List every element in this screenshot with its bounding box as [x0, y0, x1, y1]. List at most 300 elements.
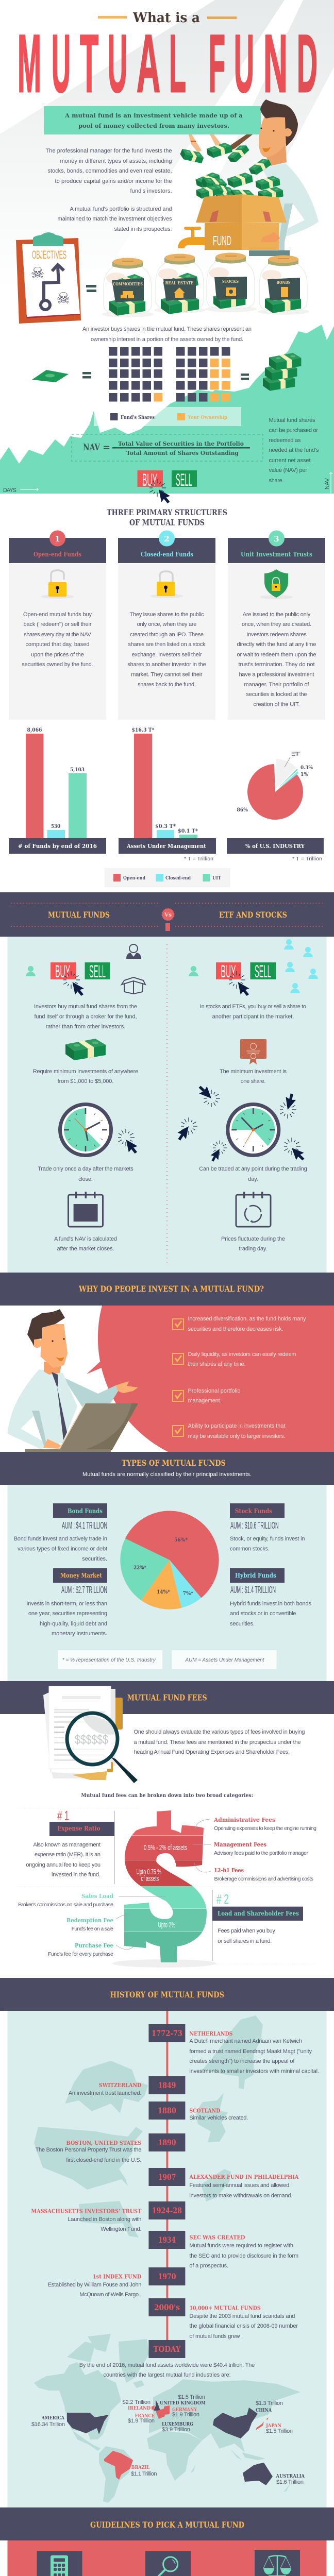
chart legend	[104, 868, 230, 887]
fee: redemption: Redemption Fee	[66, 1917, 113, 1924]
buy sell buttons	[51, 962, 110, 997]
fees intro text: One should always evaluate the various types of fees involved in buying	[134, 1729, 305, 1735]
text: trade timing	[38, 1166, 133, 1182]
buy sell buttons: BUY	[142, 470, 157, 490]
dollar sign labels	[136, 1843, 187, 1929]
load fees text: or sell shares in a fund.	[218, 1938, 272, 1944]
timeline: 1849	[69, 2076, 185, 2096]
timeline: 1907: ALEXANDER FUND IN PHILADELPHIA	[189, 2173, 299, 2180]
text: prices: trading day.	[239, 1246, 267, 1252]
pie chart: percent of US industry: 1%	[300, 771, 308, 777]
load fees text: Fees paid when you buy	[218, 1928, 275, 1934]
versus badge	[162, 909, 174, 931]
timeline: 1890	[36, 2133, 185, 2163]
fund type: stock funds: AUM : $10.6 TRILLION	[230, 1520, 278, 1531]
guideline: portfolio managers	[135, 2551, 201, 2576]
countries highlighted: dark	[67, 2400, 273, 2485]
fee: administrative: Operating expenses to keep the engine running	[214, 1825, 316, 1832]
timeline: 2000s: 10,000+ MUTUAL FUNDS	[189, 2304, 261, 2311]
icon: clock	[226, 1103, 280, 1157]
fund type: hybrid funds: Hybrid funds invest in both bonds	[230, 1601, 311, 1607]
icon: other participants	[284, 939, 318, 993]
dollar fees diagram	[17, 1808, 316, 1968]
fund type: money market: one year, securities representing	[28, 1611, 107, 1617]
bar chart: assets under management: $0.1 T*	[178, 828, 198, 834]
label: Australia: AUSTRALIA	[276, 2474, 305, 2479]
fee: 12-b1: Brokerage commissions and advertising costs	[214, 1876, 313, 1882]
fee: administrative: Administrative Fees	[213, 1816, 275, 1823]
NAV formula: Total Amount of Shares Outstanding	[126, 449, 239, 456]
footnote: * T = Trillion	[292, 856, 322, 862]
icon: calendar with clock	[236, 1192, 271, 1227]
right column: etf and stocks flow	[175, 939, 318, 1252]
fund type: money market	[26, 1568, 107, 1637]
reason 4	[173, 1423, 286, 1439]
title word: MUTUAL FUND	[18, 18, 318, 109]
dollar sign labels: Upto 2%	[158, 1921, 175, 1929]
reason 1: securities and therefore decreases risk.	[188, 1326, 283, 1332]
text: trade timing: Can be traded at any point during the trading	[199, 1166, 307, 1172]
expense ratio text: expense ratio (MER). It is an	[35, 1852, 101, 1858]
chart caption	[119, 838, 216, 854]
money pile	[195, 157, 283, 205]
timeline: 1907	[148, 2168, 299, 2199]
NAV explanation text	[269, 417, 319, 484]
title word: MUTUAL FUND: L	[169, 18, 186, 109]
dollar sign labels: of assets	[141, 1874, 159, 1883]
icon: investor	[189, 966, 198, 976]
equals right	[241, 374, 249, 380]
icon: calculator	[51, 2555, 68, 2576]
timeline: 1934: 1934	[158, 2235, 176, 2245]
card text: shares back to the fund.	[138, 682, 196, 688]
card text: Are issued to the public only	[243, 612, 311, 618]
NAV formula: Total Value of Securities in the Portfolio	[118, 440, 244, 447]
category: expense ratio: Expense Ratio	[58, 1824, 100, 1832]
expense ratio text: invested in the fund.	[52, 1872, 101, 1878]
card text: created through an IPO. These	[130, 632, 204, 638]
expense ratio text	[26, 1842, 101, 1878]
band heading: mutual fund fees	[0, 1681, 334, 1714]
label: Ireland: $2.2 Trillion	[123, 2399, 151, 2405]
label: Luxemburg: LUXEMBURG	[162, 2422, 193, 2427]
card text: creation of the UIT.	[254, 702, 300, 708]
bar chart: assets under management: $16.3 T*	[132, 727, 155, 733]
fee: redemption: Fund's fee on a sale	[72, 1926, 113, 1932]
magnifier: $$$$$$	[75, 1733, 108, 1747]
left column: mutual funds flow	[26, 944, 145, 1252]
timeline: 1970: 1970	[158, 2272, 176, 2281]
text: where shares come from: fund itself or through a broker for the fund,	[34, 1014, 137, 1020]
text: minimum investment: The minimum investment is	[220, 1069, 287, 1075]
fund type: money market: Money Market	[60, 1571, 102, 1579]
card text: securities is locked at the	[246, 691, 307, 698]
timeline: 1772-73	[148, 2024, 319, 2074]
reason 3: Professional portfolio	[188, 1388, 240, 1394]
fund type: hybrid funds: Hybrid Funds	[235, 1571, 276, 1579]
band heading: history	[0, 1978, 334, 2011]
text: nav timing	[54, 1236, 117, 1252]
timeline: 1924-28: MASSACHUSETTS INVESTORS' TRUST	[31, 2207, 142, 2214]
NAV formula: NAV	[83, 442, 101, 453]
bar chart: assets under management	[119, 727, 216, 862]
timeline: 2000s: 2000's	[154, 2302, 180, 2312]
timeline: today: countries with the largest mutual fund industries are:	[103, 2372, 231, 2378]
card: closed-end funds	[118, 531, 215, 720]
label: Australia	[276, 2474, 305, 2485]
timeline: 2000s	[148, 2298, 298, 2340]
reason 4: Ability to participate in investments that	[188, 1423, 286, 1429]
mountain chart background	[0, 325, 334, 494]
timeline: 1880	[148, 2102, 248, 2121]
bar chart: number of funds: 530	[51, 823, 60, 829]
banner text: A mutual fund is an investment vehicle made up of a	[64, 112, 243, 119]
label: Ireland: IRELAND	[128, 2406, 151, 2411]
buy sell buttons: BUY	[55, 962, 70, 981]
footnote: * T = Trillion	[184, 856, 213, 862]
buy sell buttons: BUY	[221, 962, 236, 981]
panel: comparison	[7, 937, 327, 1273]
title word: MUTUAL FUND: A	[137, 18, 160, 109]
legend: fund's shares: Fund's Shares	[121, 415, 155, 420]
chart axis labels: NAV	[324, 478, 330, 489]
clipboard: objectives	[16, 232, 81, 324]
reason 2: Daily liquidity, as investors can easily redeem	[188, 1351, 296, 1358]
background maps	[34, 2015, 263, 2238]
intro text: stocks, bonds, commodities and even real estate,	[47, 168, 172, 174]
timeline: 1907: Featured semi-annual issues and allowed	[189, 2182, 289, 2189]
reason 4: may be available only to larger investors.	[188, 1433, 286, 1439]
fee: purchase: Fund's fee for every purchase	[48, 1951, 113, 1957]
text: prices: Prices fluctuate during the	[221, 1236, 285, 1242]
text: trade timing: close.	[78, 1176, 93, 1182]
hand on box	[261, 232, 280, 242]
title word: MUTUAL FUND: U	[52, 18, 71, 109]
label: Japan	[265, 2424, 293, 2434]
dollar sign labels: 0.5% - 2% of assets	[144, 1843, 187, 1852]
chart legend: Closed-end	[165, 875, 191, 881]
shares text: An investor buys shares in the mutual fund. These shares represent an	[82, 326, 252, 332]
intro banner	[44, 106, 261, 134]
timeline: today	[79, 2340, 255, 2378]
fee: sales load: Sales Load	[81, 1892, 113, 1900]
card text: shares are then listed on a stock	[128, 641, 206, 648]
badge 1: 1	[55, 534, 60, 544]
fee: management: Advisory fees paid to the portfolio manager	[214, 1850, 308, 1856]
chart legend: Open-end	[123, 875, 145, 881]
card text: upon the prices of the	[31, 652, 84, 658]
legend: your ownership: Your Ownership	[188, 415, 227, 420]
fund type: hybrid funds: securities.	[230, 1621, 255, 1627]
jar: stocks	[205, 252, 257, 312]
band heading: guidelines: GUIDELINES TO PICK A MUTUAL FUND	[90, 2520, 244, 2530]
NAV explanation text: redeemed as	[269, 437, 301, 444]
fund type: bond funds: various types of fixed income or debt	[18, 1546, 107, 1552]
text: where shares come from: another participant in the market.	[212, 1014, 294, 1020]
fund type: money market: high-quality, liquid debt and	[40, 1621, 107, 1627]
label: America: $16.34 Trillion	[31, 2421, 65, 2428]
chart caption	[227, 838, 324, 854]
NAV formula: =	[103, 442, 110, 453]
text: prices	[221, 1236, 285, 1252]
jars row	[102, 252, 309, 317]
timeline: 1772-73: investments to smaller investors with minimal capital.	[189, 2068, 319, 2074]
card text: shares every day at the NAV	[24, 632, 91, 638]
icon: balance scale	[263, 2555, 291, 2576]
badge 1	[49, 531, 65, 546]
label: United Kingdom	[160, 2394, 206, 2406]
icons: many click cursors	[175, 1084, 306, 1163]
text: minimum investment	[220, 1069, 287, 1084]
timeline: 1890: BOSTON, UNITED STATES	[66, 2139, 141, 2146]
text: where shares come from: Investors buy mutual fund shares from the	[34, 1004, 137, 1010]
shirt	[7, 1369, 77, 1449]
heading: three primary structures: THREE PRIMARY STRUCTURES	[107, 507, 227, 517]
title word: MUTUAL FUND: M	[18, 18, 41, 109]
card text: Open-end mutual funds buy	[23, 612, 92, 618]
fee: management: Management Fees	[214, 1841, 266, 1848]
timeline: 1934: SEC WAS CREATED	[189, 2234, 245, 2241]
bar chart: number of funds: 8,066	[27, 727, 42, 733]
dollar sign	[124, 1810, 207, 1962]
timeline: 1934: of a prospectus.	[189, 2263, 228, 2269]
reasons checklist	[173, 1316, 306, 1439]
timeline: 1934: the SEC and to provide disclosure in the form	[189, 2253, 298, 2259]
title word: MUTUAL FUND: T	[80, 18, 98, 109]
band heading: types of mutual funds	[0, 1452, 334, 1485]
card text: trust's termination. They do not	[238, 662, 314, 668]
icon: magnifying glass	[159, 2557, 178, 2576]
band heading: mutual fund fees: MUTUAL FUND FEES	[127, 1693, 207, 1702]
reason 2: their shares at any time.	[188, 1361, 245, 1367]
label: Luxemburg	[162, 2422, 193, 2433]
jar: real estate: REAL ESTATE	[165, 281, 194, 286]
card text: only once, when they are	[137, 621, 196, 628]
expense ratio text: ongoing annual fee to keep you	[26, 1862, 101, 1868]
fee: administrative	[213, 1816, 316, 1832]
tie	[52, 1372, 67, 1440]
fund type: hybrid funds	[230, 1568, 311, 1627]
label: America	[31, 2416, 65, 2428]
versus badge: Vs	[164, 912, 172, 918]
fee: 12-b1	[214, 1867, 313, 1882]
fund type: stock funds	[230, 1503, 305, 1552]
buy sell buttons	[216, 962, 276, 997]
icon: investor	[26, 966, 36, 976]
band heading: types of mutual funds: TYPES OF MUTUAL FUNDS	[122, 1458, 226, 1468]
jar: commodities	[102, 258, 154, 317]
timeline: 1907: investors to make withdrawals on demand.	[189, 2193, 292, 2199]
category: expense ratio	[49, 1822, 114, 1836]
icon: closed padlock	[151, 571, 183, 598]
bar chart: number of funds	[9, 727, 106, 854]
face	[40, 1324, 68, 1368]
money stack icon	[263, 353, 301, 391]
pie chart: percent of US industry: ETF	[291, 751, 300, 757]
chart axis labels	[3, 472, 332, 494]
label: France: $1.9 Trillion	[128, 2418, 155, 2424]
text: minimum investment: Require minimum investments of anywhere	[33, 1069, 138, 1075]
pie chart: percent of US industry	[227, 751, 324, 862]
label: America: AMERICA	[41, 2416, 65, 2421]
card text: market. They cannot sell their	[131, 672, 203, 678]
text: minimum investment: from $1,000 to $5,000.	[58, 1078, 113, 1084]
fund type: bond funds	[14, 1503, 107, 1562]
intro text: to produce capital gains and/or income for the	[55, 178, 172, 184]
bar chart: assets under management: $0.3 T*	[155, 823, 176, 829]
comparison band	[0, 892, 334, 937]
fee: 12-b1: 12-b1 Fees	[214, 1867, 244, 1874]
timeline: 1772-73: NETHERLANDS	[189, 2030, 232, 2037]
NAV explanation text: can be purchased or	[269, 428, 318, 434]
text: minimum investment	[33, 1069, 138, 1084]
intro text: stated in its prospectus.	[114, 226, 172, 232]
illustration: man with laptop	[7, 1309, 138, 1452]
card: unit investment trusts	[228, 531, 325, 720]
label: Germany	[172, 2408, 199, 2418]
intro text: maintained to match the investment objectives	[58, 216, 172, 222]
reason 3: management.	[188, 1398, 222, 1404]
left column: mutual funds flow: SELL	[89, 962, 106, 981]
hair	[27, 1309, 65, 1357]
chart caption	[9, 838, 106, 854]
card text: or wait to redeem them upon the	[237, 652, 316, 658]
heading: three primary structures	[107, 507, 227, 528]
text: where shares come from: rather than from other investors.	[46, 1024, 125, 1030]
band heading: why invest	[0, 1273, 334, 1306]
intro text: fund's investors.	[130, 188, 172, 194]
guideline: calculator	[24, 2551, 95, 2576]
timeline: 1880: SCOTLAND	[189, 2107, 220, 2114]
hands with cash	[189, 134, 202, 152]
timeline: 1970: Established by William Fouse and John	[48, 2282, 141, 2288]
banner text: pool of money collected from many investors.	[78, 122, 229, 129]
text: trade timing: Trade only once a day after the markets	[38, 1166, 133, 1172]
label: United Kingdom: UNITED KINGDOM	[160, 2401, 206, 2406]
label: China: CHINA	[256, 2408, 272, 2413]
fund type: stock funds: Stock Funds	[235, 1507, 272, 1515]
icon: clock	[58, 1103, 113, 1157]
heading: etf and stocks: ETF AND STOCKS	[219, 910, 287, 920]
card text: back ("redeem") or sell their	[24, 621, 92, 628]
timeline: 1890: The Boston Personal Property Trust was the	[36, 2147, 141, 2153]
title word: MUTUAL FUND: U	[234, 18, 254, 109]
NAV explanation text: Mutual fund shares	[269, 417, 315, 423]
label: Brazil	[131, 2465, 157, 2477]
chart legend: UIT	[212, 875, 221, 881]
pie chart: percent of US industry: 86%	[237, 807, 248, 813]
fee: sales load: Broker's commissions on sale and purchase	[18, 1902, 113, 1908]
band heading: types of mutual funds: Mutual funds are normally classified by their principal investments.	[82, 1471, 252, 1478]
timeline: 1934: Mutual funds were required to register with	[189, 2243, 293, 2249]
shares text: ownership interest in a portion of the assets owned by the fund.	[91, 336, 243, 343]
fees subheading: Mutual fund fees can be broken down into two broad categories:	[81, 1792, 253, 1799]
title accent bar right	[207, 16, 237, 19]
timeline: 1772-73: formed a trust named Eendragt Maakt Magt ("unity	[189, 2048, 312, 2055]
panel: guidelines	[7, 2540, 327, 2576]
category: load and shareholder fees	[212, 1907, 303, 1921]
title word: MUTUAL FUND: F	[209, 18, 225, 109]
badge 3	[269, 531, 285, 546]
fee: sales load	[18, 1892, 113, 1908]
timeline: 2000s: of mutual funds grew .	[189, 2333, 243, 2340]
label: Brazil: $1.1 Trillion	[131, 2471, 157, 2477]
fee: purchase	[48, 1942, 113, 1957]
hair	[260, 99, 298, 146]
card text: computed that day, based	[26, 641, 90, 648]
label: Germany: $1.9 Trillion	[172, 2412, 199, 2418]
faucet	[178, 227, 205, 248]
timeline: today: TODAY	[154, 2344, 181, 2354]
timeline: 1890: 1890	[158, 2138, 176, 2147]
NAV explanation text: needed at the fund's	[269, 447, 319, 453]
fee: management	[214, 1841, 308, 1856]
category: load and shareholder fees: Load and Shareholder Fees	[218, 1910, 299, 1917]
NAV explanation text: current net asset	[269, 457, 310, 464]
text: where shares come from	[34, 1004, 137, 1030]
timeline: 1880: Similar vehicles created.	[189, 2115, 248, 2121]
reason 2	[173, 1351, 296, 1367]
intro text: The professional manager for the fund invests the	[45, 148, 172, 154]
fund type: bond funds: Bond funds invest and actively trade in	[14, 1536, 107, 1542]
reason 1: Increased diversification, as the fund holds many	[188, 1316, 306, 1322]
arm	[63, 1377, 119, 1406]
panel: history timeline	[7, 2011, 327, 2507]
equals sign	[86, 285, 96, 292]
band heading: guidelines	[0, 2507, 334, 2540]
text: nav timing: after the market closes.	[57, 1246, 114, 1252]
legend: fund's shares	[110, 413, 155, 420]
reason 3	[173, 1388, 240, 1404]
pie chart: percent of US industry: 0.3%	[300, 765, 313, 771]
clipboard: objectives: OBJECTIVES	[32, 248, 66, 261]
bar chart: number of funds: 5,103	[70, 767, 85, 773]
pie chart: fund types: 14%*	[157, 1589, 170, 1595]
timeline: 1890: first closed-end fund in the U.S.	[66, 2157, 141, 2163]
note: percent representation	[58, 1650, 162, 1669]
title	[18, 10, 318, 109]
text: trade timing	[199, 1166, 307, 1182]
fund type: bond funds: securities.	[82, 1556, 107, 1562]
timeline: 1970: 1st INDEX FUND	[93, 2273, 141, 2280]
guideline: comparing returns	[242, 2550, 313, 2576]
illustration: documents under magnifier	[43, 1686, 138, 1783]
card text	[22, 612, 93, 668]
reason 1	[173, 1316, 306, 1332]
laptop	[59, 1403, 138, 1450]
card text: They issue shares to the public	[130, 612, 204, 618]
card title: Unit Investment Trusts	[241, 550, 312, 558]
dollar sign labels: Upto 0.75 %	[136, 1868, 161, 1876]
hand	[116, 1381, 138, 1393]
dollar bill icon	[32, 370, 69, 382]
note: percent representation: * = % representation of the U.S. Industry	[62, 1657, 156, 1663]
background rays	[0, 0, 334, 289]
clipboard: objectives: ☠	[57, 290, 70, 308]
note: AUM definition	[172, 1650, 276, 1669]
timeline spine	[166, 2011, 168, 2340]
buy sell buttons	[137, 470, 197, 504]
badge 2	[159, 531, 175, 546]
share squares grid	[109, 347, 230, 402]
timeline: today: By the end of 2016, mutual fund assets worldwide were $40.4 trillion. The	[79, 2362, 255, 2368]
illustration: fund manager with money box: FUND	[213, 233, 231, 248]
icon: click cursor	[118, 1129, 139, 1155]
right column: etf and stocks flow: SELL	[255, 962, 271, 981]
icon: open box	[122, 977, 145, 994]
clipboard clip	[33, 232, 63, 246]
fund type: money market: Invests in short-term, or less than	[26, 1601, 107, 1607]
